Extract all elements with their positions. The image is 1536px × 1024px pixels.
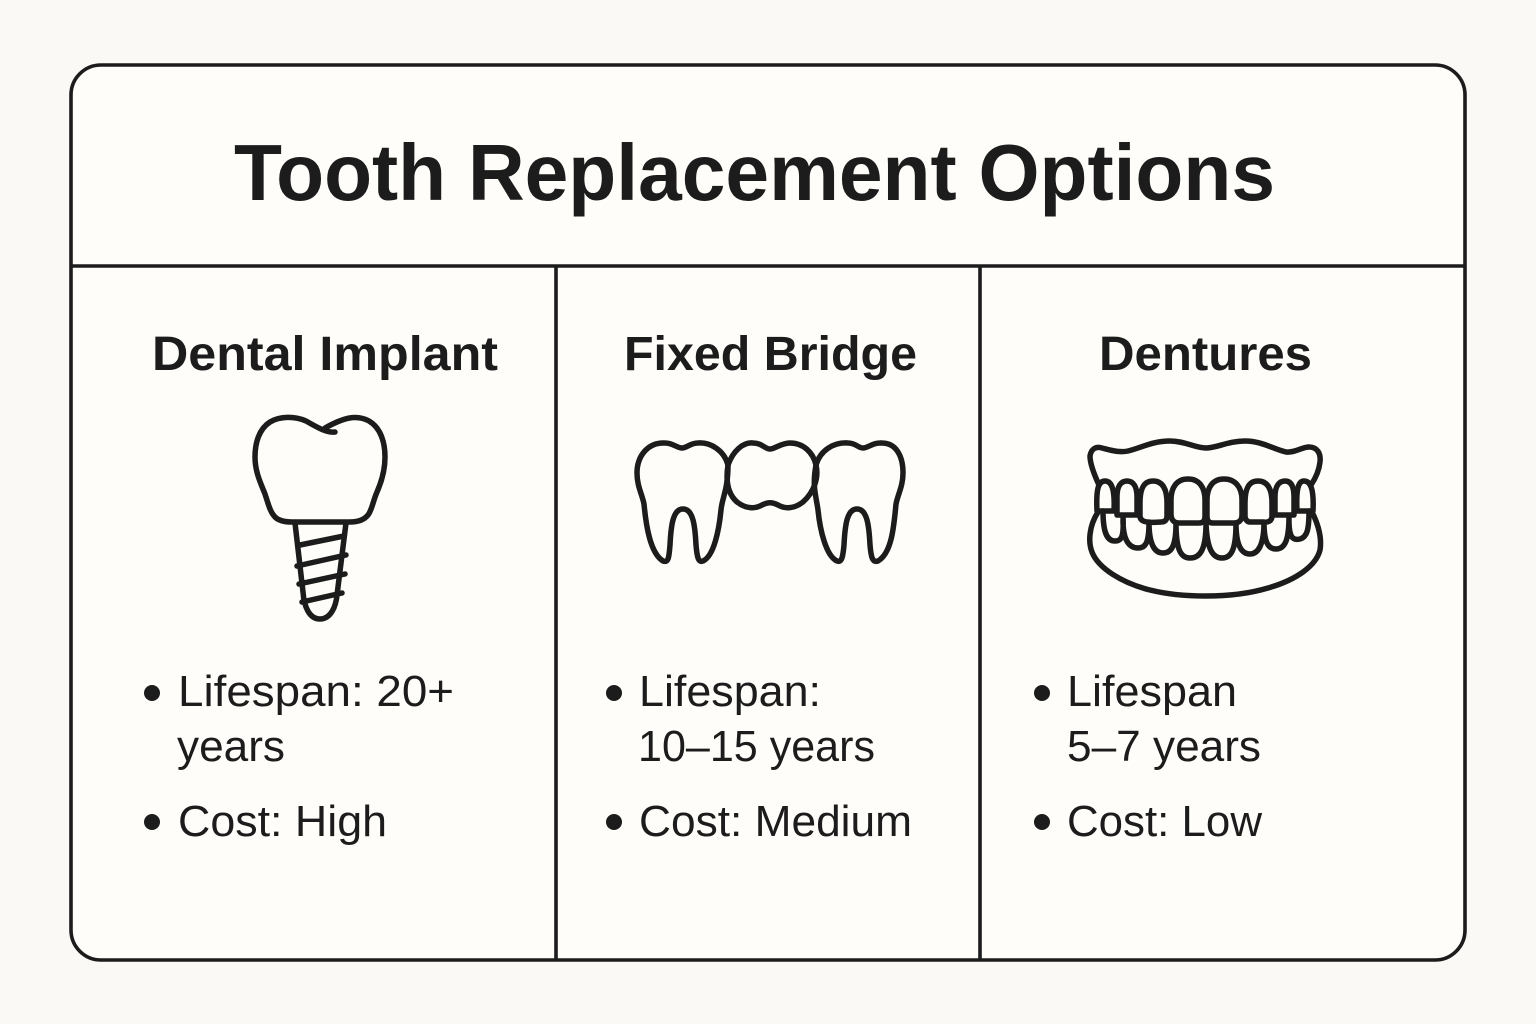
panel: dentures (1034, 328, 1321, 846)
heading: dental implant: Dental Implant (152, 328, 498, 381)
list: bridge facts: Cost: Medium (639, 797, 912, 846)
list: dentures facts (1034, 667, 1262, 846)
panel: fixed bridge (606, 328, 917, 846)
icon: fixed bridge (637, 443, 903, 561)
list: bridge facts (606, 667, 912, 846)
list: implant facts: years (177, 722, 285, 771)
icon: dentures (1090, 441, 1321, 596)
list: dentures facts: 5–7 years (1067, 722, 1261, 771)
main card (71, 65, 1465, 960)
list: dentures facts: Cost: Low (1067, 797, 1262, 846)
list: bridge facts: Lifespan: (639, 667, 821, 716)
heading: fixed bridge: Fixed Bridge (624, 328, 917, 381)
list: bridge facts: 10–15 years (638, 722, 875, 771)
title: Tooth Replacement Options (234, 128, 1275, 217)
list: implant facts (144, 667, 454, 846)
list: dentures facts: Lifespan (1067, 667, 1237, 716)
list: implant facts: Lifespan: 20+ (178, 667, 454, 716)
icon: dental implant (255, 417, 385, 619)
list: implant facts: Cost: High (178, 797, 387, 846)
panel: dental implant (144, 328, 498, 846)
heading: dentures: Dentures (1099, 328, 1312, 381)
